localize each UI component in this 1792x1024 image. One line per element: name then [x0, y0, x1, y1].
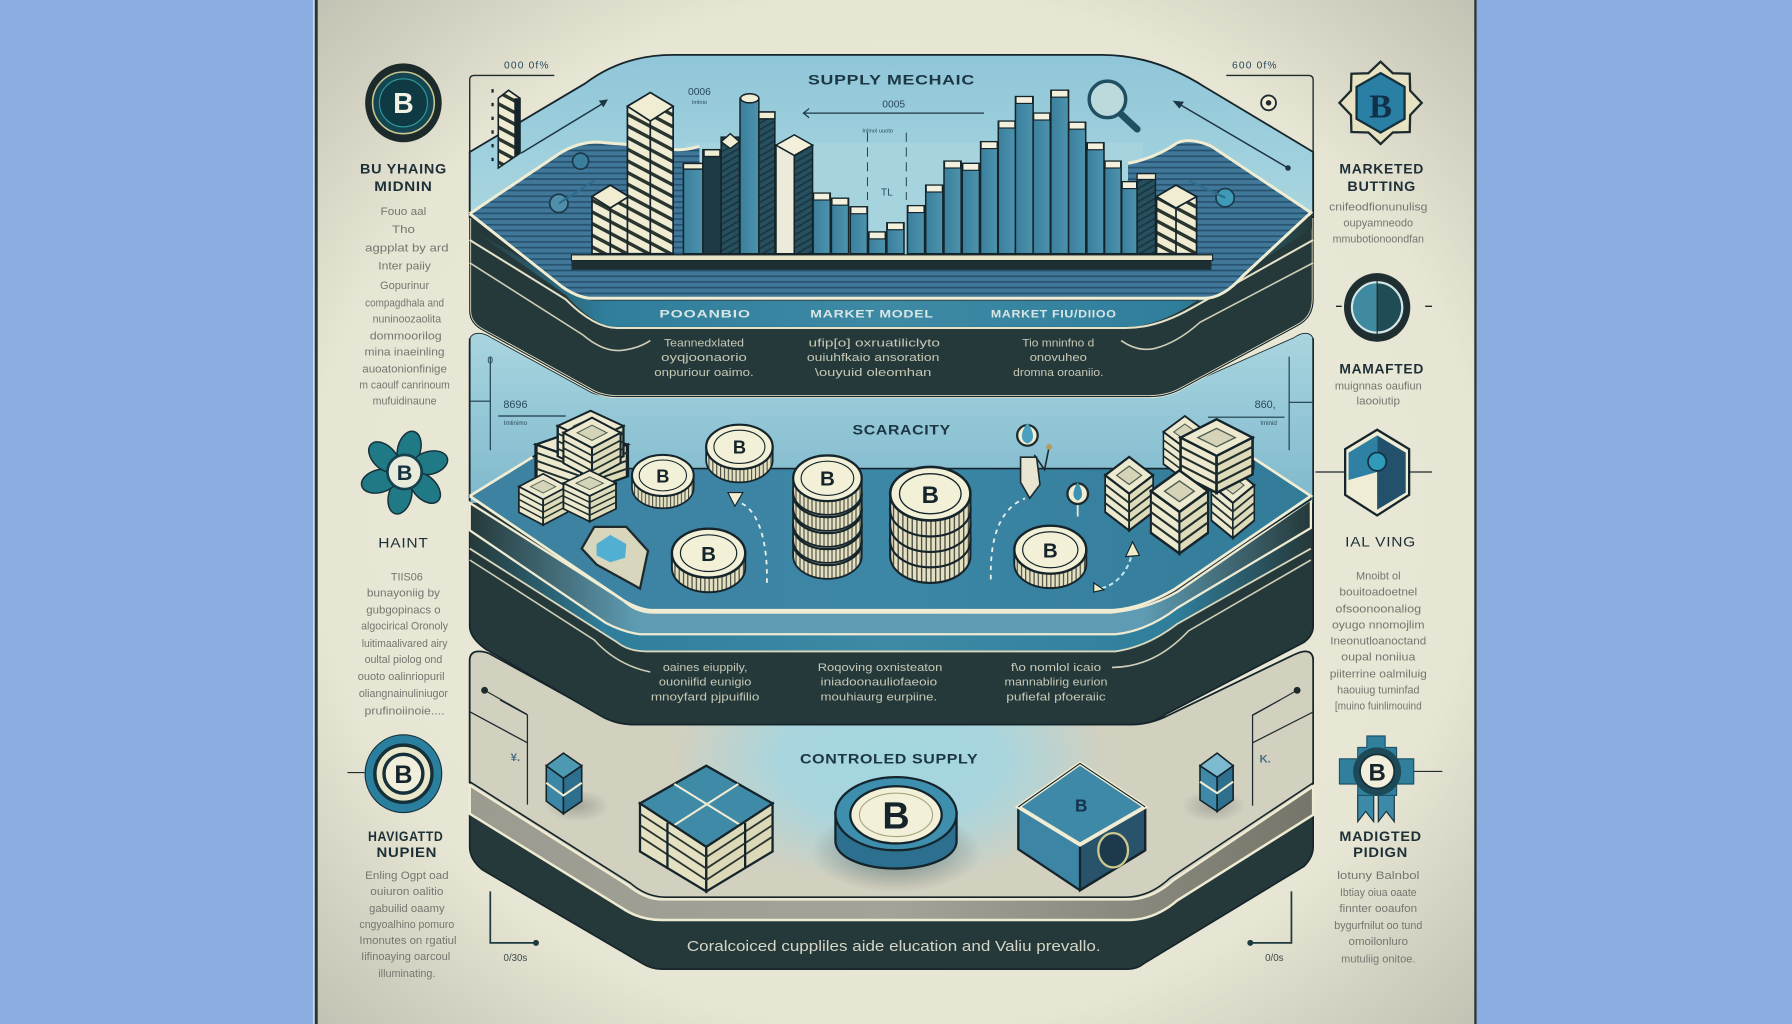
- body text: Imonutes on rgatiul: [359, 935, 457, 947]
- heading: [1339, 829, 1422, 861]
- icon: star badge: B: [1369, 88, 1392, 126]
- body text: dommoorilog: [370, 330, 442, 342]
- label left: 000 0f%: [504, 61, 550, 72]
- body text: laooiutip: [1357, 396, 1400, 408]
- body text: luitimaalivared airy: [362, 638, 448, 650]
- coin stack 1: [793, 455, 862, 579]
- body text: finnter ooaufon: [1339, 903, 1417, 915]
- body text: [muino fuinlimouind: [1335, 701, 1422, 713]
- text block: mechanic right: onovuheo: [1030, 352, 1087, 364]
- icon: coin seal: B: [393, 88, 414, 120]
- icon: flower seal: B: [397, 460, 412, 485]
- body text: [359, 206, 450, 408]
- bar chart: [571, 90, 1213, 270]
- heading: IAL VING: [1345, 534, 1416, 550]
- marker left: 8696: [503, 399, 527, 411]
- text block: mechanic left: oyqjoonaorio: [661, 352, 747, 364]
- heading: HAVIGATTD: [368, 829, 443, 845]
- coin 1: [632, 455, 694, 508]
- text block: mechanic middle: ouiuhfkaio ansoration: [807, 352, 939, 364]
- body text: omoilonluro: [1349, 936, 1408, 948]
- body text: gubgopinacs o: [366, 605, 441, 617]
- heading: HAINT: [378, 535, 429, 551]
- sidebar right: halving: [1315, 430, 1432, 713]
- body text: m caoulf canrinoum: [359, 380, 450, 392]
- grey step: [470, 785, 1313, 920]
- text block: scarcity left: mnoyfard pjpuifilio: [651, 692, 759, 704]
- label: left mark: ¥.: [511, 752, 520, 764]
- heading: MAMAFTED: [1339, 362, 1424, 378]
- icon: ring seal: B: [394, 761, 413, 789]
- pin figure: [1017, 423, 1052, 498]
- coin 2: B: [733, 437, 746, 458]
- body text: Mnoibt ol: [1356, 570, 1401, 582]
- right corner box: [1253, 700, 1313, 806]
- caption bar text: Coralcoiced cuppliles aide elucation and Valiu prevallo.: [687, 939, 1101, 955]
- body text: oupal noniiua: [1341, 652, 1417, 664]
- paper sheet: [313, 0, 1477, 1024]
- body text: mmubotionoondfan: [1333, 233, 1424, 245]
- isometric box: B: [1075, 795, 1087, 815]
- body text: ofsoonoonaliog: [1335, 604, 1421, 616]
- panel: supply mechanic: [470, 55, 1313, 397]
- body text: Iifinoaying oarcoul: [361, 951, 450, 963]
- text block: mechanic left: onpuriour oaimo.: [654, 367, 754, 379]
- text block: mechanic left: [654, 337, 754, 379]
- target icon: [1261, 95, 1276, 110]
- text block: scarcity left: [651, 662, 759, 704]
- heading: MADIGTED: [1339, 829, 1422, 845]
- marker right: 860,: [1255, 399, 1276, 411]
- body text: [359, 870, 457, 980]
- icon: coin seal: [365, 63, 442, 142]
- marker right: [1208, 357, 1313, 450]
- sidebar left: navigated: [347, 735, 457, 980]
- body text: [1334, 870, 1422, 965]
- sidebar right: mamafted: [1335, 273, 1432, 408]
- body text: Fouo aal: [381, 206, 426, 218]
- body text: agpplat by ard: [365, 242, 449, 254]
- blue band: [471, 214, 1312, 327]
- text block: mechanic middle: \ouyuid oleomhan: [815, 367, 931, 379]
- panel: scarcity: [470, 334, 1313, 725]
- coin 3: [672, 529, 745, 592]
- text block: mechanic right: Tio mninfno d: [1022, 337, 1094, 349]
- pin small: [1067, 482, 1088, 517]
- heading: [1339, 162, 1424, 195]
- marker right: Iminid: [1260, 420, 1277, 427]
- bullet right: [1294, 687, 1301, 694]
- heading: controlled supply: CONTROLED SUPPLY: [800, 751, 978, 767]
- body text: [1330, 570, 1427, 713]
- body text: algocirical Oronoly: [361, 621, 449, 633]
- band labels: POOANBIO: [659, 309, 751, 321]
- heading: BU YHAING: [360, 162, 447, 178]
- heading: MIDNIN: [374, 179, 433, 195]
- text block: mechanic right: dromna oroaniio.: [1013, 367, 1103, 379]
- scale labels: 0006: [688, 87, 711, 98]
- axis mark right: [1247, 891, 1291, 964]
- small hatched column: [493, 89, 520, 169]
- sidebar left: halving mint: [358, 429, 450, 717]
- body text: haouiug tuminfad: [1337, 685, 1419, 697]
- heading: scarcity: SCARACITY: [853, 422, 951, 438]
- heading: MARKETED: [1339, 162, 1424, 178]
- decorative curve left: [470, 263, 650, 351]
- scale labels: 0005: [882, 99, 905, 110]
- heading: NUPIEN: [377, 845, 437, 861]
- text block: mechanic right: [1013, 337, 1103, 379]
- body text: Enling Ogpt oad: [365, 870, 449, 882]
- coin stack 1: B: [820, 468, 835, 491]
- floor: [470, 455, 1311, 610]
- coin stack 2: [890, 467, 970, 583]
- corner rule right: [1226, 75, 1313, 152]
- body text: [1335, 381, 1422, 408]
- body text: cngyoalhino pomuro: [359, 919, 454, 931]
- coin 1: B: [656, 465, 669, 486]
- pool: [470, 141, 1311, 298]
- body text: ouoto oalinriopuril: [358, 671, 445, 683]
- body text: compagdhala and: [365, 297, 444, 309]
- sidebar right: marketed: [1329, 62, 1427, 245]
- body text: TIIS06: [391, 572, 423, 584]
- heading: [360, 162, 447, 195]
- heading: BUTTING: [1347, 179, 1416, 195]
- label right: 600 0f%: [1232, 61, 1278, 72]
- pool dots: [550, 153, 1234, 213]
- decorative curve right: [1112, 560, 1311, 667]
- stacked bill block: [640, 766, 773, 891]
- band labels: [659, 309, 1117, 321]
- arrow right: [1173, 101, 1291, 171]
- panel base shape: [470, 651, 1313, 969]
- scale labels: [688, 87, 906, 200]
- sky behind bars: [686, 143, 1143, 257]
- body text: oultal piolog ond: [365, 654, 442, 666]
- scale labels: TL: [881, 187, 893, 198]
- icon: star badge: [1339, 62, 1422, 144]
- marker left: 0: [487, 355, 493, 366]
- right end bars: [1137, 174, 1197, 254]
- coin 2: [706, 425, 773, 482]
- text block: scarcity left: oaines eiuppily,: [663, 662, 747, 674]
- axis mark left: 0/30s: [504, 953, 527, 964]
- text block: scarcity left: ouoniifid eunigio: [659, 677, 751, 689]
- marker left: [470, 355, 566, 450]
- dashed arrow left: [728, 493, 767, 583]
- sidebar left: buying: [359, 63, 450, 408]
- body text: muignnas oaufiun: [1335, 381, 1422, 393]
- text block: scarcity right: mannablirig eurion: [1005, 677, 1107, 689]
- panel base shape: [470, 334, 1313, 725]
- body text: Inter paiiy: [378, 261, 432, 273]
- blue steps: [470, 503, 1311, 651]
- big coin: B: [882, 795, 910, 837]
- scale labels: Imlnio: [692, 100, 707, 106]
- panel: controlled supply: [470, 651, 1313, 969]
- bar caps: [814, 90, 1137, 239]
- body text: bygurfnilut oo tund: [1334, 920, 1422, 932]
- body text: nuninoozaolita: [373, 313, 442, 325]
- body text: prufinoiinoie....: [365, 705, 445, 717]
- heading: supply mechanic: SUPPLY MECHAIC: [808, 73, 975, 89]
- icon: hexagon: [1315, 430, 1432, 515]
- corner rule left: [470, 75, 554, 152]
- body text: oyugo nnomojlim: [1332, 620, 1425, 632]
- body text: mutuliig onitoe.: [1341, 953, 1415, 965]
- heading: [368, 829, 443, 861]
- body text: cnifeodfionunulisg: [1329, 201, 1427, 213]
- body text: Tho: [392, 224, 415, 236]
- text block: scarcity middle: [818, 662, 942, 704]
- label: right mark: K.: [1259, 753, 1271, 765]
- decorative curve right: [1121, 263, 1313, 349]
- body text: bunayoniig by: [367, 588, 441, 600]
- dark base: [470, 214, 1313, 397]
- shelf: [571, 255, 1213, 270]
- bill stacks left: [519, 411, 627, 525]
- body text: lotuny Balnbol: [1337, 870, 1419, 882]
- text block: mechanic middle: [807, 337, 940, 379]
- icon: flower seal: [359, 429, 450, 517]
- small pillar left: [545, 753, 609, 822]
- text block: scarcity middle: mouhiaurg eurpiine.: [821, 692, 937, 704]
- icon: ribbon badge: [1339, 736, 1442, 822]
- body text: [358, 572, 449, 717]
- big coin: [810, 777, 982, 893]
- decorative curve left: [470, 560, 650, 672]
- body text: auoatonionfinige: [362, 364, 447, 376]
- magnifier: [1089, 81, 1137, 129]
- body text: gabuilid oaamy: [369, 903, 445, 915]
- band labels: MARKET MODEL: [810, 309, 934, 321]
- arrow left: [521, 99, 608, 153]
- body text: Ibtiay oiua oaate: [1340, 887, 1417, 899]
- text block: scarcity middle: Roqoving oxnisteaton: [818, 662, 942, 674]
- sky: [470, 55, 1313, 217]
- icon: ribbon badge: B: [1368, 760, 1386, 787]
- bullet left: [481, 687, 488, 694]
- gem: [582, 527, 648, 589]
- blue capped bars: [813, 90, 1137, 254]
- heading: PIDIGN: [1353, 845, 1408, 861]
- axis mark left: [490, 891, 539, 964]
- body text: mina inaeinling: [365, 346, 445, 358]
- body text: bouitoadoetnel: [1339, 586, 1417, 598]
- body text: oupyamneodo: [1343, 217, 1413, 229]
- axis mark right: 0/0s: [1265, 953, 1284, 964]
- text block: scarcity right: pufiefal pfoeraiic: [1006, 692, 1106, 704]
- coin 3: B: [701, 543, 716, 566]
- body text: oliangnainuliniugor: [359, 688, 448, 700]
- band labels: MARKET FIU/DIIOO: [991, 309, 1117, 321]
- dashed arrow middle: [991, 498, 1025, 579]
- body text: Gopurinur: [380, 280, 430, 292]
- isometric box: [1018, 763, 1145, 890]
- icon: ring seal: [347, 735, 442, 813]
- text block: mechanic middle: ufip[o] oxruatiliclyto: [809, 337, 940, 349]
- body text: piiterrine oalmiluig: [1330, 669, 1427, 681]
- bill stacks right: [1105, 416, 1254, 554]
- body text: ouiuron oalitio: [370, 886, 443, 898]
- text block: scarcity right: f\o nomlol icaio: [1011, 662, 1101, 674]
- text block: scarcity right: [1005, 662, 1107, 704]
- arrow center: [803, 109, 984, 118]
- coin 6: [1014, 526, 1086, 588]
- sidebar right: medicated: [1334, 736, 1442, 965]
- body text: illuminating.: [378, 968, 435, 980]
- dashed arrow right: [1094, 542, 1139, 592]
- coin stack 2: B: [922, 482, 939, 509]
- marker left: Imlinimo: [504, 420, 528, 427]
- body text: [1329, 201, 1427, 245]
- blue dark bars: [683, 94, 813, 254]
- scale labels: Inlinol uuoto: [862, 129, 893, 135]
- text block: mechanic left: Teannedxlated: [664, 337, 744, 349]
- coin 6: B: [1043, 540, 1058, 563]
- small pillar right: [1182, 753, 1246, 822]
- body text: mufuidinaune: [373, 396, 437, 408]
- tall isometric bars: [592, 93, 673, 254]
- icon: half ring: [1336, 273, 1432, 342]
- text block: scarcity middle: iniadoonauliofaeoio: [821, 677, 937, 689]
- body text: Ineonutloanoctand: [1330, 636, 1426, 648]
- left corner box: [470, 700, 527, 805]
